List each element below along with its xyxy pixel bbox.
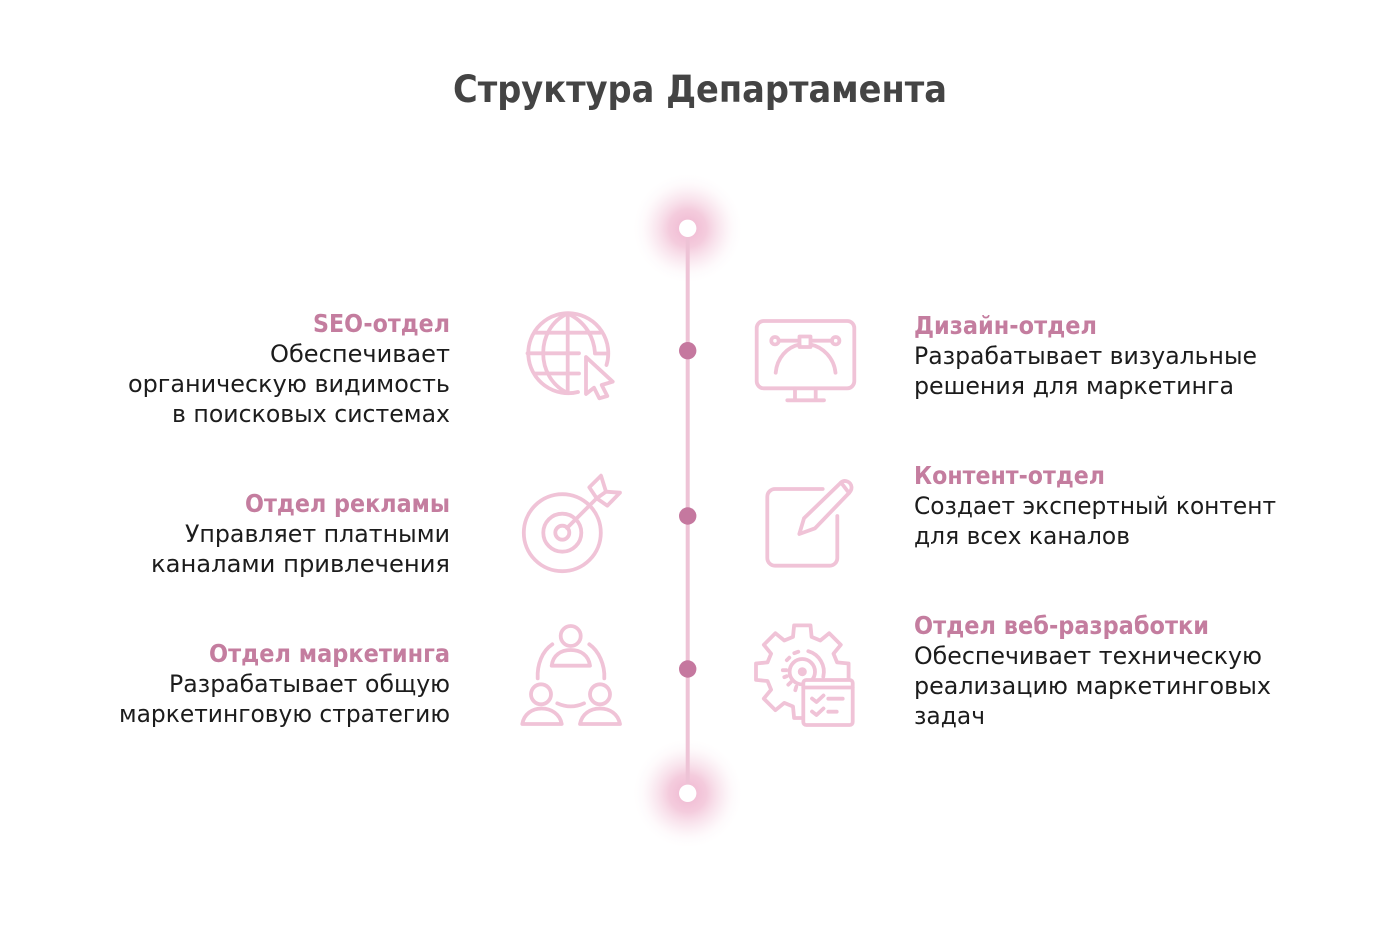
- top glow: [634, 174, 742, 282]
- description: [151, 520, 450, 578]
- bottom glow: [634, 739, 742, 847]
- description: [914, 492, 1276, 550]
- description: органическую видимость: [128, 370, 450, 398]
- description: маркетинговую стратегию: [119, 700, 450, 728]
- description: [119, 670, 450, 728]
- node 1: [679, 342, 696, 359]
- description: реализацию маркетинговых: [914, 672, 1271, 700]
- panel: advertising department: [151, 489, 450, 578]
- panel: content department: [914, 461, 1276, 550]
- icon: gear with checklist: [756, 625, 853, 725]
- description: Управляет платными: [185, 520, 450, 548]
- node 2: [679, 507, 696, 525]
- vertical line: [686, 228, 690, 793]
- icon: three people in a circle: [522, 626, 620, 724]
- description: Разрабатывает визуальные: [914, 342, 1257, 370]
- description: для всех каналов: [914, 522, 1130, 550]
- description: [128, 340, 450, 428]
- description: в поисковых системах: [172, 400, 450, 428]
- heading: Контент-отдел: [914, 461, 1105, 490]
- heading: Отдел маркетинга: [209, 639, 450, 668]
- bottom end point: [679, 785, 696, 802]
- icon: target with arrow: [524, 476, 620, 571]
- description: Разрабатывает общую: [169, 670, 450, 698]
- description: задач: [914, 702, 985, 730]
- heading: Отдел веб-разработки: [914, 611, 1209, 640]
- panel: marketing department: [119, 639, 450, 728]
- heading: Отдел рекламы: [245, 489, 450, 518]
- description: Обеспечивает техническую: [914, 642, 1262, 670]
- timeline: [634, 174, 742, 847]
- heading: Дизайн-отдел: [914, 311, 1097, 340]
- icon: globe with cursor: [528, 313, 613, 398]
- title: Структура Департамента: [453, 68, 947, 111]
- description: каналами привлечения: [151, 550, 450, 578]
- panel: web development department: [914, 611, 1271, 730]
- panel: SEO department: [128, 309, 450, 428]
- description: [914, 642, 1271, 730]
- panel: design department: [914, 311, 1257, 400]
- node 3: [679, 660, 696, 678]
- icon: monitor with bezier curve: [757, 321, 854, 400]
- description: Создает экспертный контент: [914, 492, 1276, 520]
- heading: SEO-отдел: [313, 309, 450, 338]
- top end point: [679, 220, 696, 237]
- description: [914, 342, 1257, 400]
- icon: note with pencil: [767, 481, 852, 566]
- description: решения для маркетинга: [914, 372, 1234, 400]
- description: Обеспечивает: [270, 340, 450, 368]
